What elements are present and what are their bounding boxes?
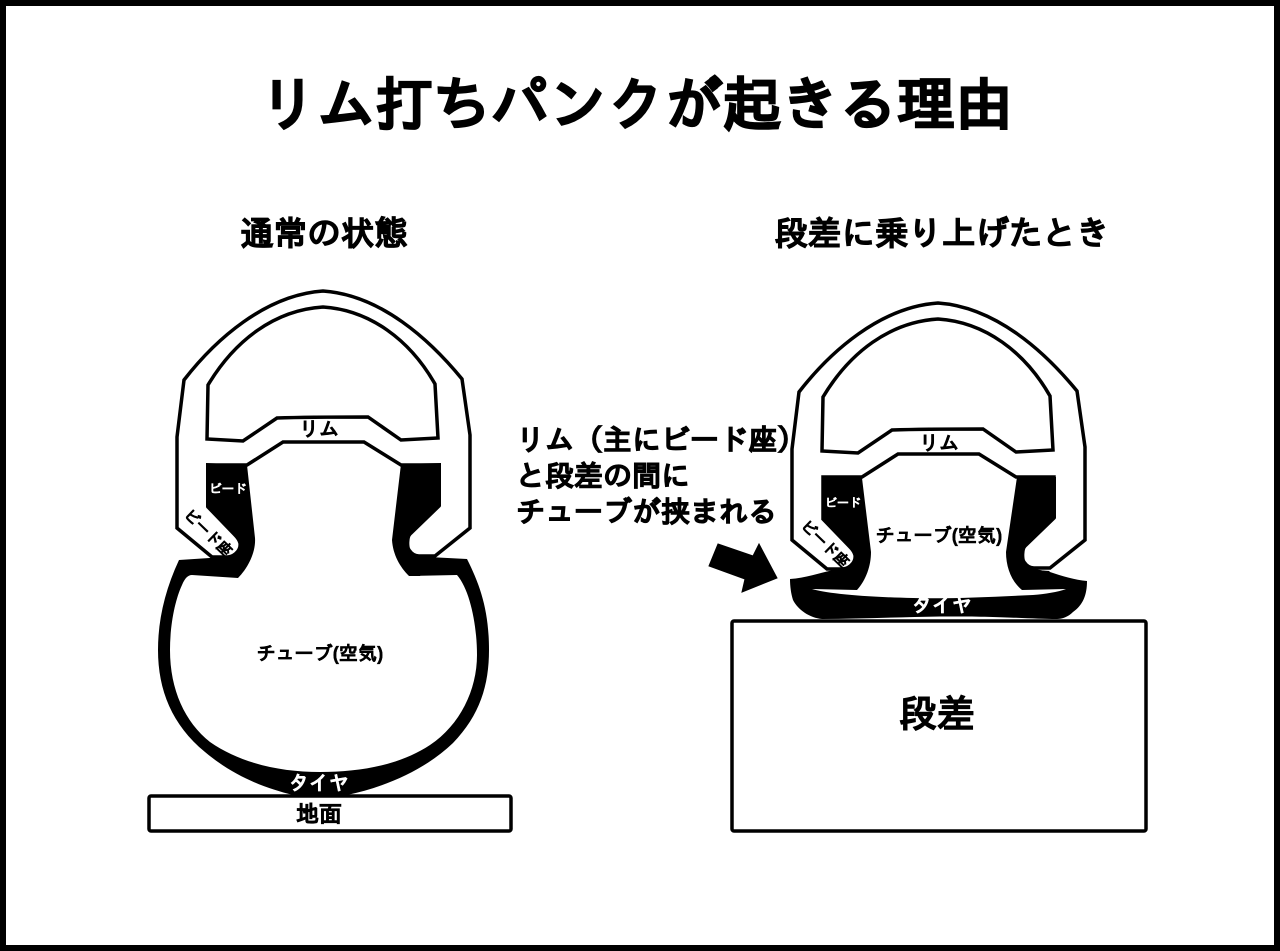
bead right [1006,477,1056,590]
label: ground: 地面 [296,801,342,827]
title: リム打ちパンクが起きる理由 [259,73,1013,138]
bead left [822,476,871,590]
ground [149,796,511,831]
label: tube (air): チューブ(空気) [257,643,383,665]
tire flattened [790,566,1087,619]
callout text: と段差の間に [516,461,690,493]
bead left [206,463,255,578]
heading: normal state: 通常の状態 [240,216,408,253]
label: bead seat: ビード座 [180,506,235,560]
bead right [392,463,441,576]
label: bead seat: ビード座 [797,517,852,571]
label: tire: タイヤ [912,595,972,617]
label: bead: ビード [209,482,247,496]
rim [792,303,1085,569]
label: tire: タイヤ [289,773,349,795]
rim inner cavity [207,307,438,441]
callout text: チューブが挟まれる [516,496,777,529]
callout text [516,425,806,529]
tire [158,556,489,795]
panel: normal state diagram [149,291,511,831]
heading: riding up on a step: 段差に乗り上げたとき [774,215,1110,253]
label: rim: リム [919,433,959,455]
label: step: 段差 [899,694,975,736]
rim inner cavity [822,319,1053,453]
label: rim: リム [299,419,339,441]
panel: step diagram [732,303,1146,831]
step block [732,621,1146,831]
label: tube (air): チューブ(空気) [876,525,1002,547]
callout text: リム（主にビード座） [516,425,806,457]
arrow [709,544,777,592]
rim [177,291,470,557]
label: bead: ビード [825,496,861,510]
